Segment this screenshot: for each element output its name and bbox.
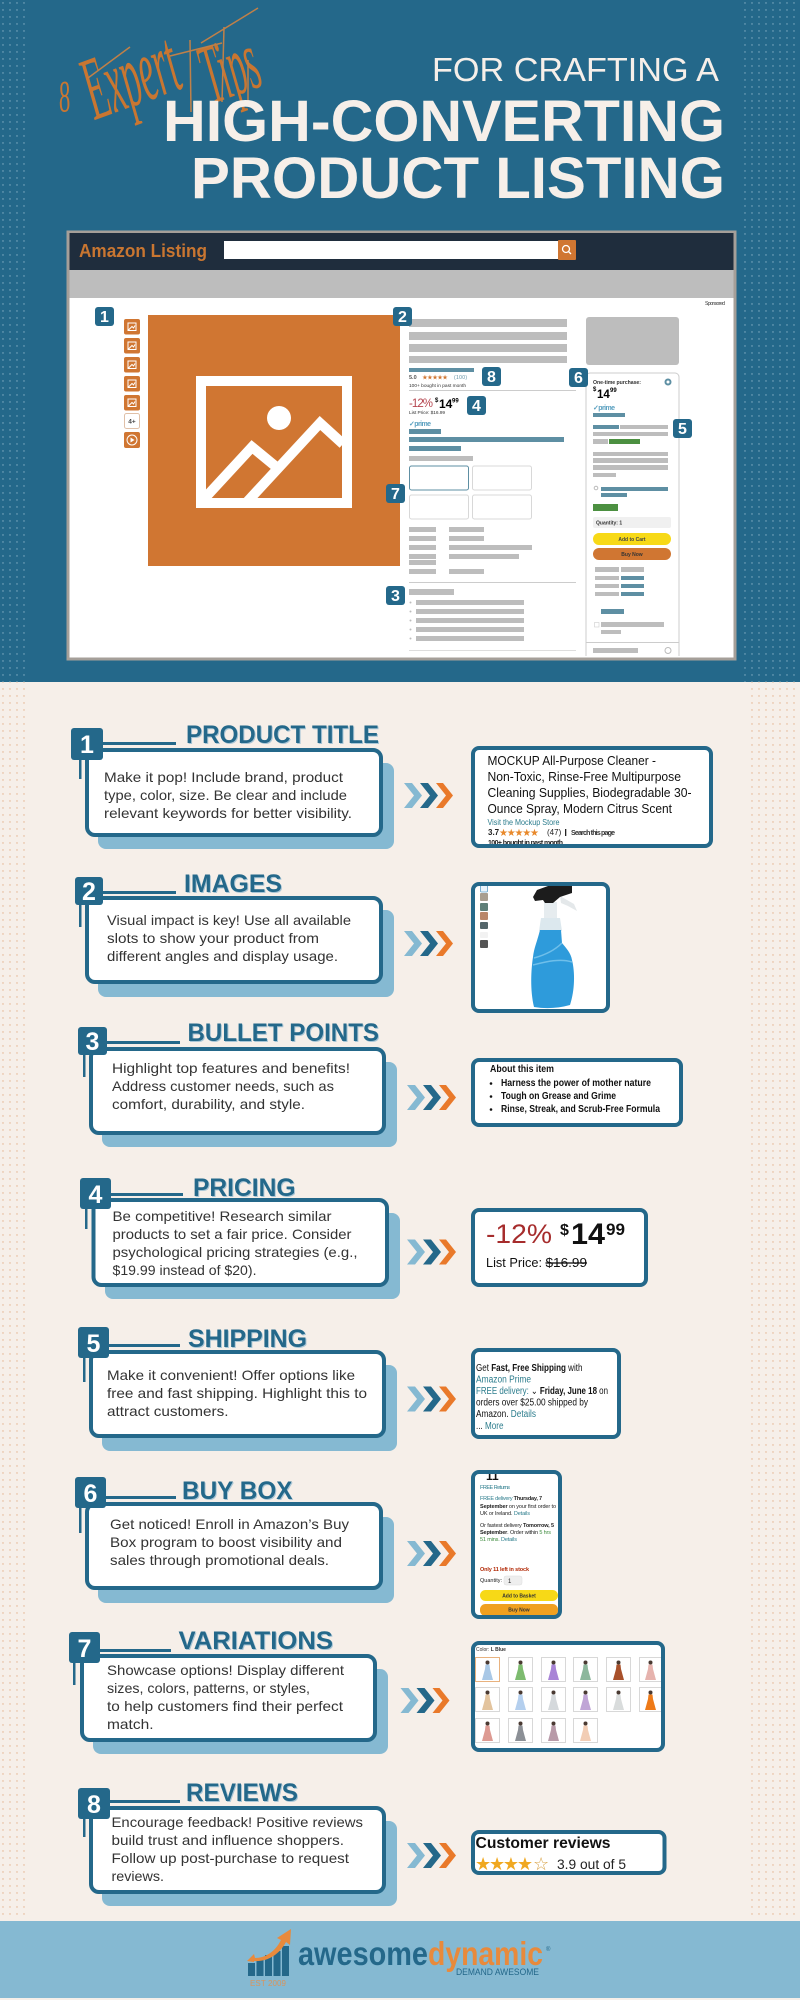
- tip 1: product title: [71, 721, 711, 849]
- thumbnail strip: [480, 885, 488, 948]
- tip 6 example: buy box: Add to Basket: [502, 1594, 536, 1600]
- tip 4 example: price: List Price:: [486, 1255, 542, 1270]
- tip 5 heading: SHIPPING: [188, 1325, 307, 1353]
- ratings row: (100): [454, 375, 467, 381]
- tip 3 example: about this item: Rinse, Streak, and Scrub-Free Formula: [501, 1104, 660, 1115]
- tip 6 example: buy box: 1: [508, 1579, 512, 1585]
- tip 6 card: Get noticed! Enroll in Amazon’s Buy: [110, 1516, 349, 1532]
- tip 5 example: shipping text: [473, 1350, 619, 1437]
- price block: 99: [452, 398, 459, 404]
- tip 7: variations: [69, 1627, 664, 1754]
- badge 3: 3: [391, 588, 400, 605]
- tip 8 card: Encourage feedback! Positive reviews: [112, 1814, 363, 1830]
- tip 1 card: [87, 750, 394, 849]
- tip 3 card: Address customer needs, such as: [112, 1078, 334, 1094]
- tip 3 arrows: [407, 1085, 456, 1110]
- badge 2: 2: [398, 309, 407, 326]
- tip 2 heading: IMAGES: [184, 870, 282, 898]
- tip 5 example: shipping text: ... More: [476, 1421, 504, 1432]
- tip 6 example: buy box: 51 mins. Details: [480, 1537, 517, 1543]
- logo wordmark: ®: [546, 1946, 551, 1953]
- side dot pattern on beige: [0, 682, 800, 1920]
- tip 5 number badge: [78, 1327, 180, 1382]
- tip 6 example: buy box: UK or Ireland. Details: [480, 1511, 530, 1517]
- tip 8 heading: REVIEWS: [186, 1779, 298, 1807]
- tip 1 example: product title: Visit the Mockup Store: [488, 817, 560, 827]
- tip 4 arrows: [407, 1240, 456, 1264]
- sponsored label: Sponsored: [705, 301, 725, 307]
- tip 5 example: shipping text: FREE delivery: ⌄ Friday, June 18 on: [476, 1386, 608, 1397]
- tip 4 card: $19.99 instead of $20).: [112, 1262, 256, 1278]
- tip 3 example: about this item: About this item: [490, 1064, 554, 1075]
- tip 4 example: price: $16.99: [546, 1255, 587, 1270]
- spec bars: [409, 456, 576, 583]
- tip 8 card: reviews.: [112, 1868, 164, 1884]
- tip 5 example: shipping text: orders over $25.00 shipped by: [476, 1398, 588, 1408]
- tip 6 card: [87, 1504, 394, 1603]
- mockup top bar: Amazon Listing: [79, 240, 207, 261]
- tip 3 example: about this item: Harness the power of mother nature: [501, 1078, 651, 1089]
- buy box: [586, 373, 679, 656]
- tip 1 card: Make it pop! Include brand, product: [104, 769, 343, 785]
- tip 1 example: product title: ★★★★★: [499, 828, 539, 839]
- tip 7 arrows: [400, 1688, 450, 1713]
- tip 6 number badge: [75, 1477, 176, 1533]
- tip 5 card: Make it convenient! Offer options like: [107, 1367, 355, 1383]
- tip 8 example: customer reviews: Customer reviews: [476, 1835, 611, 1852]
- tip 2 card: [87, 898, 394, 997]
- product title bars: [409, 319, 567, 363]
- tip 8 number badge: [78, 1788, 180, 1837]
- tip 4 number badge: [80, 1178, 183, 1229]
- tip 3 example: about this item: [473, 1060, 681, 1125]
- ratings row: [409, 368, 576, 391]
- tip 1 arrows: [404, 783, 453, 808]
- tip 2 number badge: 2: [82, 878, 96, 906]
- tip 8 number badge: 8: [87, 1791, 101, 1819]
- tip 1 number badge: [71, 728, 176, 779]
- tip 7 example: colour swatches: Color: L Blue: [476, 1647, 506, 1653]
- logo mark: [247, 1929, 291, 1988]
- logo wordmark: dynamic: [428, 1935, 543, 1972]
- tip 5 example: shipping text: Get Fast, Free Shipping with: [476, 1363, 582, 1374]
- badge 4: 4: [472, 398, 481, 415]
- tip 3 number badge: 3: [86, 1028, 99, 1056]
- tip 6 example: buy box: September on your first order to: [480, 1504, 556, 1510]
- header band: [0, 0, 800, 682]
- tip 4 example: price: 99: [606, 1220, 625, 1239]
- ratings row: ★★★★★: [422, 374, 448, 382]
- badge 7: [386, 484, 405, 503]
- badge 6: [569, 368, 588, 387]
- tip 2 card: Visual impact is key! Use all available: [107, 912, 351, 928]
- tip 7 number badge: [69, 1632, 171, 1685]
- badge 4: [467, 396, 486, 415]
- badge 8: [482, 367, 501, 386]
- tip 7 example: colour swatches: [473, 1643, 664, 1750]
- tip 1 heading: PRODUCT TITLE: [186, 721, 379, 749]
- variation boxes: [410, 466, 532, 519]
- tip 3 card: Highlight top features and benefits!: [112, 1060, 350, 1076]
- tip 8 example: customer reviews: 3.9 out of 5: [557, 1857, 626, 1872]
- spray bottle: [531, 886, 577, 1008]
- buy box: Add to Cart: [618, 537, 646, 543]
- tip 4 example: price: 14: [571, 1218, 605, 1251]
- tip 1 example: product title: Non-Toxic, Rinse-Free Multipurpose: [488, 769, 681, 784]
- tip 2 arrows: [404, 931, 453, 956]
- delivery bars: [409, 429, 564, 451]
- buy box: ✓prime: [593, 405, 615, 412]
- logo wordmark: DEMAND AWESOME: [456, 1967, 539, 1977]
- tip 5 arrows: [407, 1386, 456, 1412]
- logo wordmark: awesome: [298, 1935, 428, 1972]
- title: FOR CRAFTING A: [432, 51, 719, 88]
- tip 8: reviews: [78, 1779, 664, 1906]
- tip 6 example: buy box: September. Order within 5 hrs: [480, 1530, 551, 1536]
- price block: List Price: $16.99: [409, 410, 445, 416]
- title: HIGH-CONVERTING: [163, 89, 725, 154]
- tip 4 example: price: -12%: [486, 1219, 552, 1249]
- tip 6: buy box: [75, 1469, 560, 1617]
- buy box: $: [593, 387, 597, 393]
- tip 4 card: Be competitive! Research similar: [112, 1208, 332, 1224]
- image thumbnails: [124, 319, 140, 448]
- panel: Amazon listing mockup: [68, 232, 735, 659]
- badge 8: 8: [487, 369, 496, 386]
- tip 3 card: comfort, durability, and style.: [112, 1096, 305, 1112]
- tip 7 card: [82, 1656, 388, 1754]
- tip 7 card: to help customers find their perfect: [107, 1698, 343, 1714]
- tip 6 example: buy box: [473, 1469, 560, 1617]
- buy box: One-time purchase:: [593, 380, 641, 386]
- tip 1 number badge: 1: [80, 731, 94, 759]
- tip 8 example: customer reviews: ☆: [533, 1854, 549, 1875]
- tip 1 example: product title: Ounce Spray, Modern Citrus Scent: [488, 801, 672, 816]
- ratings row: 100+ bought in past month: [409, 383, 466, 389]
- tip 1 example: product title: Cleaning Supplies, Biodegradable 30-: [488, 785, 692, 800]
- tip 4 number badge: 4: [89, 1181, 103, 1209]
- tip 7 card: match.: [107, 1716, 154, 1732]
- tip 7 card: sizes, colors, patterns, or styles,: [107, 1680, 310, 1696]
- badge 6: 6: [574, 370, 583, 387]
- tip 3 heading: BULLET POINTS: [188, 1019, 379, 1047]
- tip 2 card: slots to show your product from: [107, 930, 319, 946]
- script heading: 8 Expert Tips: 8: [56, 71, 72, 122]
- tip 2 card: different angles and display usage.: [107, 948, 338, 964]
- tip 8 example: customer reviews: [473, 1832, 664, 1875]
- tip 6 example: buy box: FREE Returns: [480, 1485, 510, 1491]
- badge 1: 1: [100, 309, 109, 326]
- tip 4 card: products to set a fair price. Consider: [112, 1226, 352, 1242]
- tip 5 number badge: 5: [87, 1330, 101, 1358]
- tip 2 example: product image: [473, 884, 608, 1011]
- tip 6 example: buy box: 11: [486, 1469, 499, 1483]
- tip 1 example: product title: 100+ bought in past month: [488, 840, 563, 847]
- buy box: 99: [610, 388, 617, 394]
- tip 6 example: buy box: Buy Now: [508, 1608, 530, 1614]
- tip 5 card: [91, 1352, 397, 1451]
- tip 4 heading: PRICING: [193, 1174, 296, 1202]
- tip 3 number badge: [78, 1027, 180, 1077]
- tip 7 heading: VARIATIONS: [178, 1627, 333, 1655]
- tip 1 example: product title: MOCKUP All-Purpose Cleaner -: [488, 753, 656, 768]
- tip 5 example: shipping text: Amazon Prime: [476, 1374, 531, 1386]
- tip 1 example: product title: 3.7: [488, 828, 500, 837]
- bullet bars: [409, 589, 576, 651]
- tip 6 example: buy box: Quantity:: [480, 1578, 502, 1584]
- tip 6 card: sales through promotional deals.: [110, 1552, 329, 1568]
- tip 8 card: [91, 1808, 397, 1906]
- tip 8 arrows: [407, 1843, 456, 1868]
- mockup number badges: [95, 307, 692, 605]
- tip 6 heading: BUY BOX: [182, 1477, 293, 1505]
- tip 1 card: type, color, size. Be clear and include: [104, 787, 347, 803]
- badge 7: 7: [391, 486, 400, 503]
- title: [163, 51, 725, 211]
- script heading: 8 Expert Tips: Tips: [186, 14, 272, 123]
- ad placeholder: [586, 317, 679, 365]
- footer band: [0, 1921, 800, 1998]
- tip 6 arrows: [407, 1541, 456, 1566]
- tip 6 example: buy box: FREE delivery Thursday, 7: [480, 1496, 542, 1502]
- logo mark: EST 2009: [250, 1979, 287, 1988]
- tip 3 card: [91, 1049, 397, 1147]
- price block: [409, 397, 459, 428]
- swatch grid: [476, 1658, 664, 1742]
- badge 3: [386, 586, 405, 605]
- main product image placeholder: [148, 315, 400, 566]
- tip 4: pricing: [80, 1174, 646, 1299]
- buy box: 14: [597, 389, 610, 401]
- tip 6 example: buy box: Or fastest delivery Tomorrow, 5: [480, 1523, 554, 1529]
- tip 1 card: relevant keywords for better visibility.: [104, 805, 352, 821]
- badge 2: [393, 307, 412, 326]
- price block: ✓prime: [409, 421, 431, 428]
- tip 5 card: attract customers.: [107, 1403, 228, 1419]
- tip 7 card: Showcase options! Display different: [107, 1662, 344, 1678]
- price block: $: [435, 398, 439, 404]
- tip 3: bullet points: [78, 1019, 681, 1147]
- tip 2: images: [75, 870, 608, 1011]
- price block: 14: [439, 397, 453, 411]
- script heading: 8 Expert Tips: Expert: [67, 12, 193, 139]
- tip 5 card: free and fast shipping. Highlight this to: [107, 1385, 367, 1401]
- tip 5 example: shipping text: Amazon. Details: [476, 1409, 536, 1420]
- tip 4 example: price: [473, 1210, 646, 1285]
- title: PRODUCT LISTING: [191, 146, 725, 211]
- tip 1 example: product title: [473, 748, 711, 847]
- buy box: Buy Now: [621, 552, 643, 558]
- tip 5: shipping: [78, 1325, 619, 1451]
- tip 8 example: customer reviews: ★★★★: [475, 1854, 533, 1875]
- tip 4 example: price: $: [560, 1222, 569, 1239]
- tip 8 card: Follow up post-purchase to request: [112, 1850, 349, 1866]
- script heading: 8 Expert Tips: [56, 8, 272, 139]
- tip 4 card: [94, 1200, 400, 1299]
- ratings row: 5.0: [409, 375, 417, 381]
- tip 1 example: product title: Search this page: [571, 830, 615, 837]
- tip 3 example: about this item: Tough on Grease and Grime: [501, 1091, 616, 1102]
- badge 1: [95, 307, 114, 326]
- mockup grey nav bar: [70, 270, 734, 298]
- tip 6 number badge: 6: [84, 1480, 97, 1508]
- image thumbnails: 4+: [128, 418, 136, 426]
- tip 2 number badge: [75, 877, 176, 927]
- tip 6 card: Box program to boost visibility and: [110, 1534, 342, 1550]
- tip 1 example: product title: (47): [547, 828, 562, 837]
- badge 5: [673, 419, 692, 438]
- logo wordmark: [298, 1935, 551, 1977]
- dresses: [482, 1660, 656, 1741]
- buy box: Quantity: 1: [596, 520, 622, 526]
- tip 8 card: build trust and influence shoppers.: [112, 1832, 344, 1848]
- badge 5: 5: [678, 421, 687, 438]
- tip 6 example: buy box: Only 11 left in stock: [480, 1567, 530, 1573]
- tip 4 card: psychological pricing strategies (e.g.,: [112, 1244, 358, 1260]
- tip 7 number badge: 7: [78, 1635, 91, 1663]
- mockup top bar: [70, 233, 734, 270]
- price block: -12%: [409, 398, 433, 410]
